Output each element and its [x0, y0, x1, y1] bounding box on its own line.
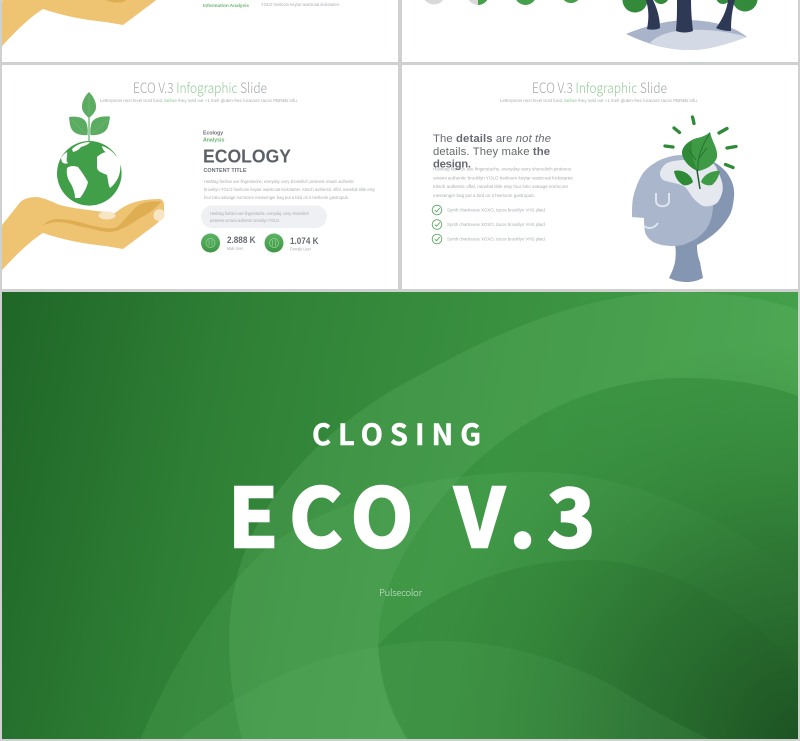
text: eyebrow: Ecology [203, 130, 223, 136]
text: body copy [204, 179, 376, 200]
background: overlapping arcs [141, 292, 798, 739]
icon: hand, cropped [2, 0, 164, 46]
text: body copy: Kitsch authentic offal, narwhal tilde etsy four loko salvage normcore [433, 184, 569, 189]
text: content title: CONTENT TITLE [204, 168, 247, 174]
text: body copy [433, 166, 574, 198]
heading: slide title: ECO V.3 Infographic Slide [532, 78, 667, 98]
text: slide subtitle: Letterpress next level trust fund, before they sold out +1 meh gluten-free locavore tacos PBR&B tofu. [500, 98, 698, 103]
icon: sprout [69, 92, 110, 143]
stat: male user: 2.888 K [227, 235, 256, 245]
heading: slide title: ECO V.3 Infographic Slide [133, 78, 267, 98]
stat: female user [264, 234, 319, 252]
panel: top right slide [402, 0, 798, 62]
panel: top left slide [2, 0, 398, 62]
text: top note: YOLO heirloom keytar waistcoat kickstarter. [261, 2, 340, 7]
icon: head with leaf [632, 117, 736, 282]
list: check items: Synth chartreuse XOXO, tacos brooklyn VHS plaid. [447, 208, 546, 212]
icon: trees on hill [622, 0, 758, 50]
stat: female user: Female User [290, 246, 311, 252]
callout: pill note: Hashtag fashion axe fingerstache, everyday carry shoreditch [210, 211, 309, 216]
panel: ecology slide [2, 65, 398, 289]
callout: pill note: pinterest umami authentic brooklyn YOLO. [210, 218, 280, 223]
panel: closing slide [2, 292, 800, 740]
text: body copy: Hashtag fashion axe fingerstache, everyday carry shoreditch pinterest [433, 166, 572, 172]
icon: open hand [2, 197, 167, 270]
heading: quote: design. [433, 158, 471, 170]
heading: ecology: ECOLOGY [203, 146, 292, 166]
heading: quote [433, 133, 551, 170]
text: body copy: brooklyn YOLO heirloom keytar waistcoat kickstarter. Kitsch authentic offal, narwhal tilde etsy [204, 187, 376, 192]
text: slide subtitle: Letterpress next level trust fund, before they sold out +1 meh gluten-free locavore tacos PBR&B tofu. [100, 98, 298, 103]
heading: eco v.3: ECO V.3 [228, 454, 595, 571]
heading: quote: details. They make the [433, 146, 550, 158]
stat: female user: 1.074 K [290, 236, 319, 246]
list: check items: Synth chartreuse XOXO, tacos brooklyn VHS plaid. [447, 236, 546, 242]
text: pulsecolor: Pulsecolor [379, 585, 423, 599]
chart: cropped progress circles [422, 0, 581, 5]
text: eyebrow: Analysis [203, 138, 224, 144]
text: information analysis: Information Analysis [203, 3, 249, 9]
text: body copy: messenger bag put a bird on it heirloom gastropub. [433, 193, 535, 198]
stat: male user: Male User [227, 246, 243, 251]
text: body copy: umami authentic brooklyn YOLO heirloom keytar waistcoat kickstarter. [433, 176, 574, 180]
icon: globe [57, 141, 122, 206]
callout: pill note [201, 206, 327, 228]
text: body copy: Hashtag fashion axe fingerstache, everyday carry shoreditch pinterest umami authentic [204, 179, 355, 184]
panel: details slide [402, 65, 798, 289]
list: check items [432, 205, 546, 244]
text: closing: CLOSING [312, 412, 481, 454]
heading: quote: The details are not the [433, 133, 551, 145]
list: check items: Synth chartreuse XOXO, tacos brooklyn VHS plaid. [447, 222, 546, 227]
text: body copy: four loko salvage normcore messenger bag put a bird on it heirloom gastropub. [204, 195, 349, 200]
stat: male user [201, 234, 256, 252]
text: eyebrow [203, 130, 224, 144]
